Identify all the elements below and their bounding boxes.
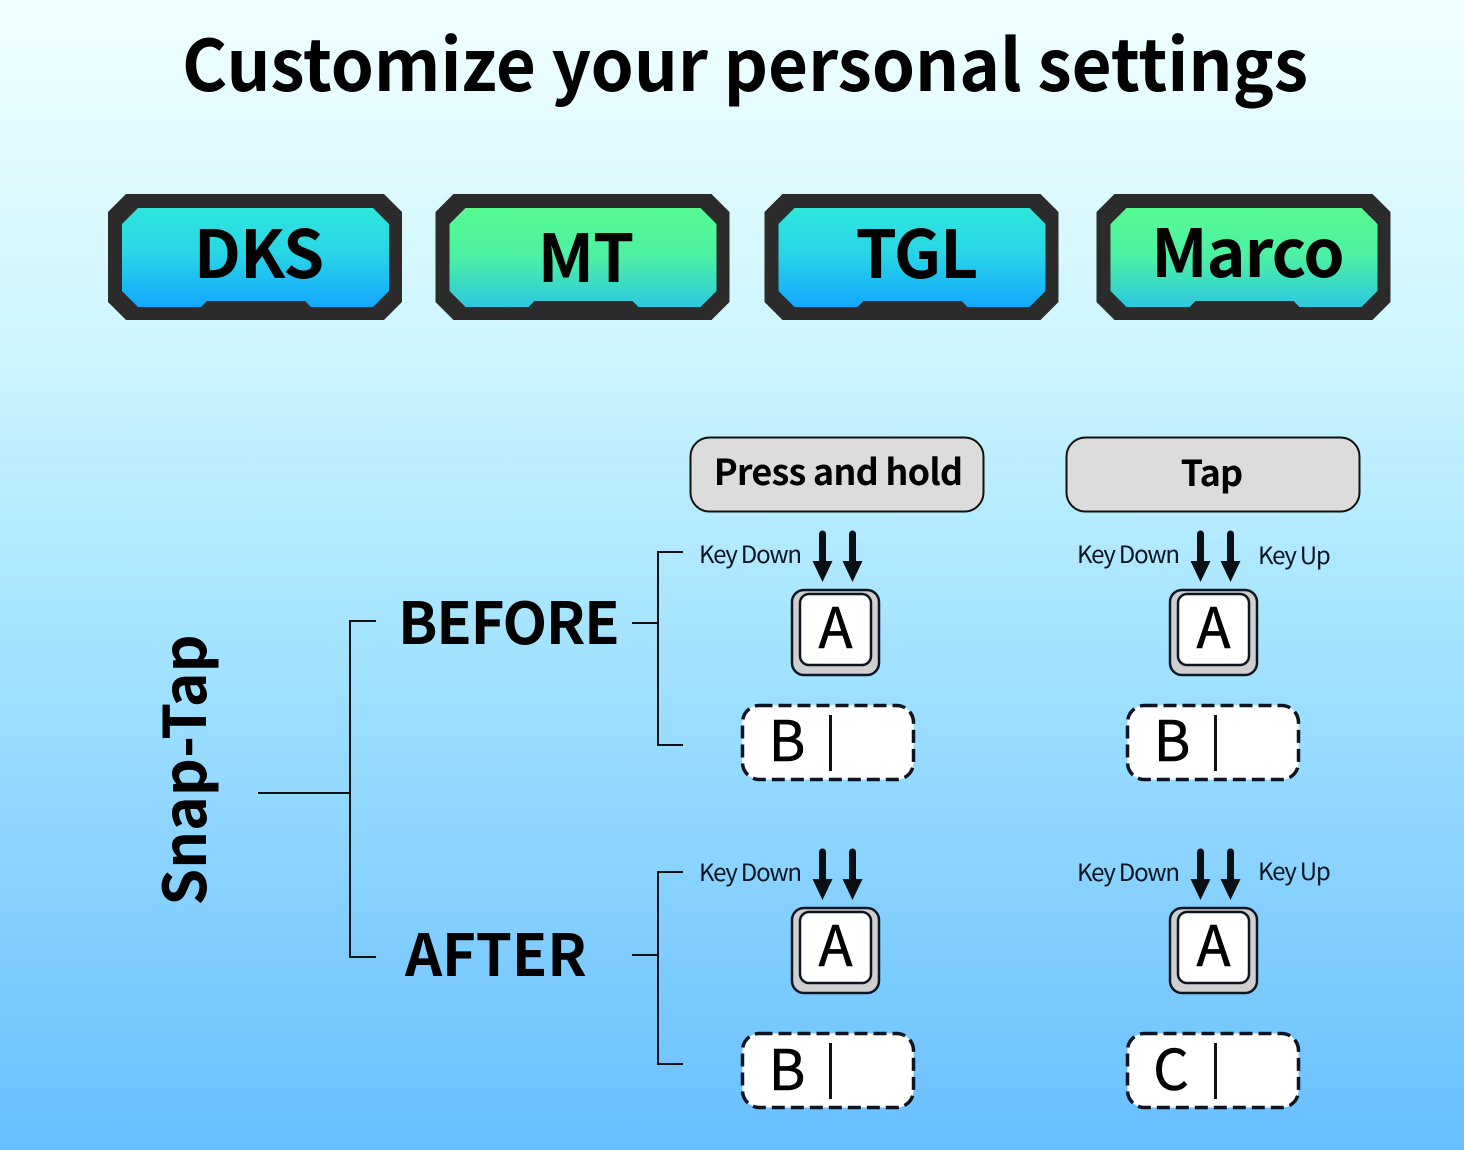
badge: DKS bbox=[108, 194, 402, 320]
label: key down: Key Down bbox=[1077, 853, 1179, 888]
icon: two down arrows bbox=[1190, 852, 1240, 900]
key: A: A bbox=[1196, 584, 1231, 665]
header: Tap bbox=[1066, 438, 1360, 512]
input box: B bbox=[1128, 697, 1298, 780]
badge: TGL: TGL bbox=[856, 202, 977, 298]
key: A bbox=[792, 584, 879, 675]
input box: B: B bbox=[1154, 697, 1190, 778]
title: Customize your personal settings bbox=[182, 10, 1308, 112]
label: key down: Key Down bbox=[699, 535, 801, 570]
label: AFTER: AFTER bbox=[404, 909, 587, 993]
badge: MT: MT bbox=[538, 206, 633, 302]
label: key up: Key Up bbox=[1258, 536, 1330, 571]
badge: Marco: Marco bbox=[1151, 201, 1344, 297]
icon: two down arrows bbox=[812, 534, 862, 582]
badge: DKS: DKS bbox=[194, 202, 323, 298]
header: Press and hold: Press and hold bbox=[714, 444, 962, 496]
tree: before bracket bbox=[632, 552, 683, 745]
label: key up: Key Up bbox=[1258, 852, 1330, 887]
badge: Marco bbox=[1096, 194, 1390, 320]
tree: root bracket bbox=[258, 621, 376, 957]
header: Tap: Tap bbox=[1181, 445, 1242, 497]
badge: MT bbox=[436, 194, 730, 320]
group: after, press and hold bbox=[699, 852, 914, 1108]
label: key down: Key Down bbox=[699, 853, 801, 888]
key: A: A bbox=[818, 584, 853, 665]
label: BEFORE: BEFORE bbox=[398, 577, 618, 661]
group: before, press and hold bbox=[699, 534, 914, 780]
icon: two down arrows bbox=[812, 852, 862, 900]
input box: B: B bbox=[769, 1026, 805, 1107]
input box: B bbox=[742, 697, 914, 780]
label: Snap-Tap: Snap-Tap bbox=[138, 634, 223, 906]
badge: TGL bbox=[764, 194, 1058, 320]
label: key down: Key Down bbox=[1077, 535, 1179, 570]
input box: C bbox=[1128, 1026, 1298, 1108]
key: A: A bbox=[1196, 902, 1231, 983]
icon: two down arrows bbox=[1190, 534, 1240, 582]
input box: C: C bbox=[1153, 1026, 1189, 1107]
input box: B bbox=[742, 1026, 914, 1108]
key: A bbox=[1170, 902, 1257, 993]
group: before, tap bbox=[1077, 534, 1330, 780]
header: Press and hold bbox=[690, 438, 984, 512]
key: A bbox=[1170, 584, 1257, 675]
key: A bbox=[792, 902, 879, 993]
group: after, tap bbox=[1077, 852, 1330, 1108]
tree: after bracket bbox=[632, 872, 683, 1064]
input box: B: B bbox=[769, 697, 805, 778]
key: A: A bbox=[818, 902, 853, 983]
